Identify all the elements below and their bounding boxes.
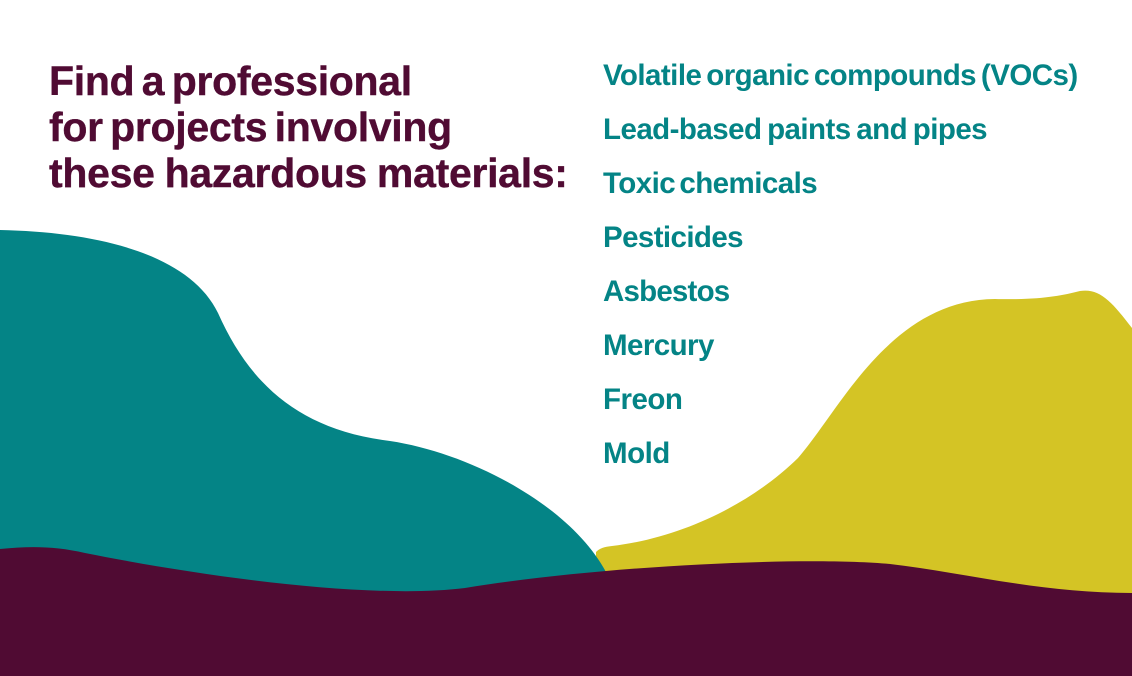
list of hazardous materials: Freon bbox=[603, 383, 682, 416]
list of hazardous materials: Volatile organic compounds (VOCs) bbox=[603, 59, 1078, 92]
list of hazardous materials: Lead-based paints and pipes bbox=[603, 113, 987, 146]
hill: plum bbox=[0, 547, 1132, 676]
list of hazardous materials bbox=[603, 59, 1078, 470]
list of hazardous materials: Asbestos bbox=[603, 275, 729, 308]
heading: Find a professional bbox=[49, 58, 412, 104]
list of hazardous materials: Pesticides bbox=[603, 221, 743, 254]
hill: yellow bbox=[596, 291, 1132, 610]
hill: teal bbox=[0, 230, 606, 610]
list of hazardous materials: Toxic chemicals bbox=[603, 167, 817, 200]
heading: these hazardous materials: bbox=[49, 150, 568, 196]
heading: for projects involving bbox=[49, 104, 452, 150]
heading bbox=[49, 58, 568, 196]
list of hazardous materials: Mold bbox=[603, 437, 670, 470]
list of hazardous materials: Mercury bbox=[603, 329, 714, 362]
